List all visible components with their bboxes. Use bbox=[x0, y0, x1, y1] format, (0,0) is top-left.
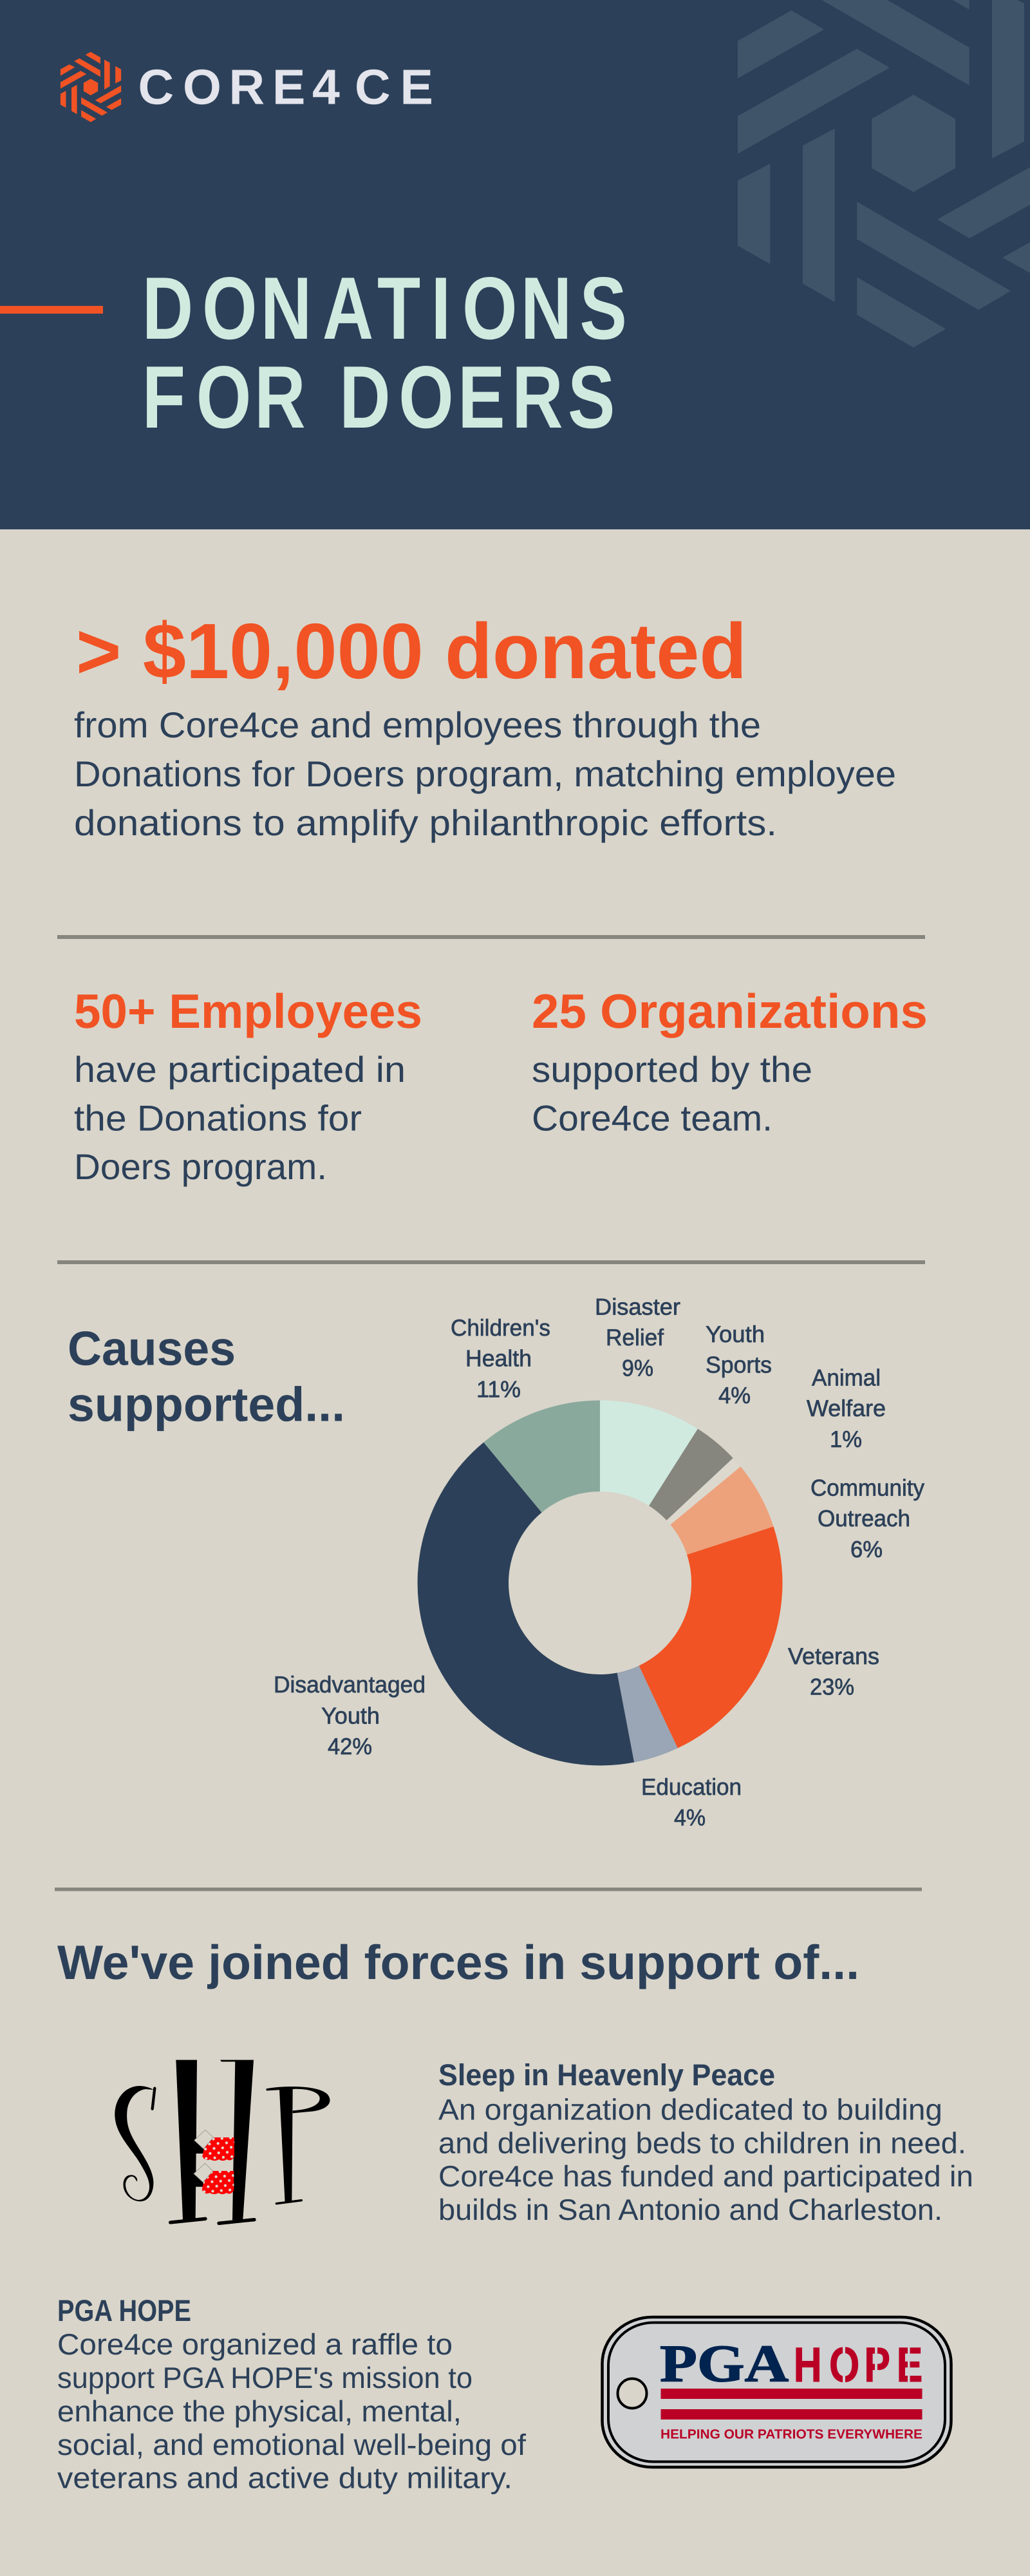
label: animal welfare bbox=[807, 1364, 886, 1452]
text block: Sleep in Heavenly Peace: Sleep in Heavenly Peace bbox=[438, 2058, 775, 2092]
stat text: employees bbox=[74, 1049, 406, 1187]
label: animal welfare: Welfare bbox=[807, 1395, 886, 1421]
label: animal welfare: Animal bbox=[812, 1364, 881, 1391]
text block: PGA HOPE: support PGA HOPE's mission to bbox=[57, 2361, 473, 2394]
text block: PGA HOPE bbox=[57, 2293, 526, 2495]
text block: Sleep in Heavenly Peace bbox=[438, 2058, 973, 2226]
logo wordmark: CORE4CE bbox=[138, 59, 433, 115]
text block: PGA HOPE: social, and emotional well-being of bbox=[57, 2428, 526, 2461]
label: veterans: 23% bbox=[810, 1673, 854, 1700]
title: FOR DOERS bbox=[142, 348, 615, 447]
label: youth sports: 4% bbox=[718, 1382, 751, 1408]
letter S bbox=[115, 2086, 154, 2201]
label: veterans bbox=[788, 1643, 879, 1700]
decorative hexagon weave pattern bbox=[738, 0, 1030, 348]
label: disaster relief bbox=[595, 1293, 680, 1381]
label: youth sports: Sports bbox=[706, 1351, 772, 1378]
label: disadvantaged youth bbox=[274, 1671, 426, 1759]
panel: employees stat bbox=[74, 984, 422, 1187]
label: youth sports: Youth bbox=[706, 1321, 765, 1347]
text block: donation description: Donations for Doers program, matching employee bbox=[74, 753, 896, 794]
PGA wordmark: PGA bbox=[660, 2334, 789, 2393]
text block: PGA HOPE: enhance the physical, mental, bbox=[57, 2394, 462, 2428]
label: animal welfare: 1% bbox=[830, 1426, 862, 1452]
accent bar bbox=[0, 306, 103, 314]
letter H with beds bbox=[171, 2060, 254, 2223]
label: education: Education bbox=[641, 1774, 742, 1800]
stat text: employees: Doers program. bbox=[74, 1146, 327, 1187]
label: community outreach bbox=[810, 1475, 924, 1562]
headline: amount donated: > $10,000 donated bbox=[76, 607, 747, 695]
stat text: organizations bbox=[532, 1049, 812, 1139]
stat text: employees: have participated in bbox=[74, 1049, 406, 1090]
logo: Sleep in Heavenly Peace bbox=[115, 2060, 330, 2223]
text block: Sleep in Heavenly Peace: An organization dedicated to building bbox=[438, 2093, 942, 2126]
panel: organizations stat bbox=[532, 984, 928, 1139]
text block: PGA HOPE: veterans and active duty military. bbox=[57, 2461, 512, 2495]
text block: Sleep in Heavenly Peace: and delivering beds to children in need. bbox=[438, 2126, 966, 2160]
panel: total donated bbox=[74, 607, 896, 843]
text block: donation description: donations to amplify philanthropic efforts. bbox=[74, 802, 777, 843]
heading: joined forces: We've joined forces in support of... bbox=[57, 1935, 859, 1989]
label: community outreach: Community bbox=[810, 1475, 924, 1501]
title bbox=[142, 260, 627, 447]
label: children's health bbox=[451, 1314, 550, 1403]
heading: causes bbox=[68, 1321, 345, 1431]
label: children's health: Children's bbox=[451, 1314, 550, 1341]
panel: partner organizations bbox=[57, 1935, 973, 2495]
donut chart bbox=[418, 1400, 782, 1766]
heading: causes: Causes bbox=[68, 1321, 236, 1376]
text block: donation description: from Core4ce and employees through the bbox=[74, 705, 761, 745]
text block: donation description bbox=[74, 705, 896, 843]
label: education bbox=[641, 1774, 742, 1830]
label: disadvantaged youth: Disadvantaged bbox=[274, 1671, 426, 1698]
label: disaster relief: Relief bbox=[606, 1324, 664, 1350]
stat heading: employees: 50+ Employees bbox=[74, 984, 422, 1038]
panel: header bbox=[0, 0, 1030, 529]
stat text: organizations: Core4ce team. bbox=[532, 1097, 772, 1139]
HOPE wordmark: HOPE bbox=[794, 2338, 922, 2392]
label: disaster relief: 9% bbox=[622, 1355, 653, 1381]
label: disaster relief: Disaster bbox=[595, 1293, 680, 1320]
label: children's health: 11% bbox=[476, 1376, 521, 1403]
stat heading: organizations: 25 Organizations bbox=[532, 984, 928, 1038]
logo: PGA HOPE dog tag bbox=[603, 2317, 951, 2467]
tagline: HELPING OUR PATRIOTS EVERYWHERE bbox=[660, 2427, 922, 2442]
stat text: employees: the Donations for bbox=[74, 1097, 362, 1139]
heading: causes: supported... bbox=[68, 1377, 345, 1431]
tag hole bbox=[618, 2379, 646, 2409]
text block: Sleep in Heavenly Peace: Core4ce has funded and participated in bbox=[438, 2159, 973, 2193]
title: DONATIONS bbox=[142, 260, 627, 358]
icon: Core4ce logo mark bbox=[61, 52, 121, 122]
letter P bbox=[266, 2087, 330, 2204]
label: education: 4% bbox=[674, 1804, 706, 1830]
text block: Sleep in Heavenly Peace: builds in San Antonio and Charleston. bbox=[438, 2193, 942, 2226]
text block: PGA HOPE: PGA HOPE bbox=[57, 2293, 191, 2327]
label: community outreach: 6% bbox=[850, 1536, 883, 1562]
label: youth sports bbox=[706, 1321, 772, 1408]
label: disadvantaged youth: 42% bbox=[328, 1733, 372, 1759]
label: veterans: Veterans bbox=[788, 1643, 879, 1669]
text block: PGA HOPE: Core4ce organized a raffle to bbox=[57, 2327, 453, 2361]
label: community outreach: Outreach bbox=[818, 1505, 910, 1531]
panel: causes supported bbox=[68, 1293, 924, 1830]
label: disadvantaged youth: Youth bbox=[321, 1703, 380, 1728]
red stripes bbox=[660, 2389, 922, 2420]
stat text: organizations: supported by the bbox=[532, 1049, 812, 1090]
label: children's health: Health bbox=[465, 1345, 532, 1372]
